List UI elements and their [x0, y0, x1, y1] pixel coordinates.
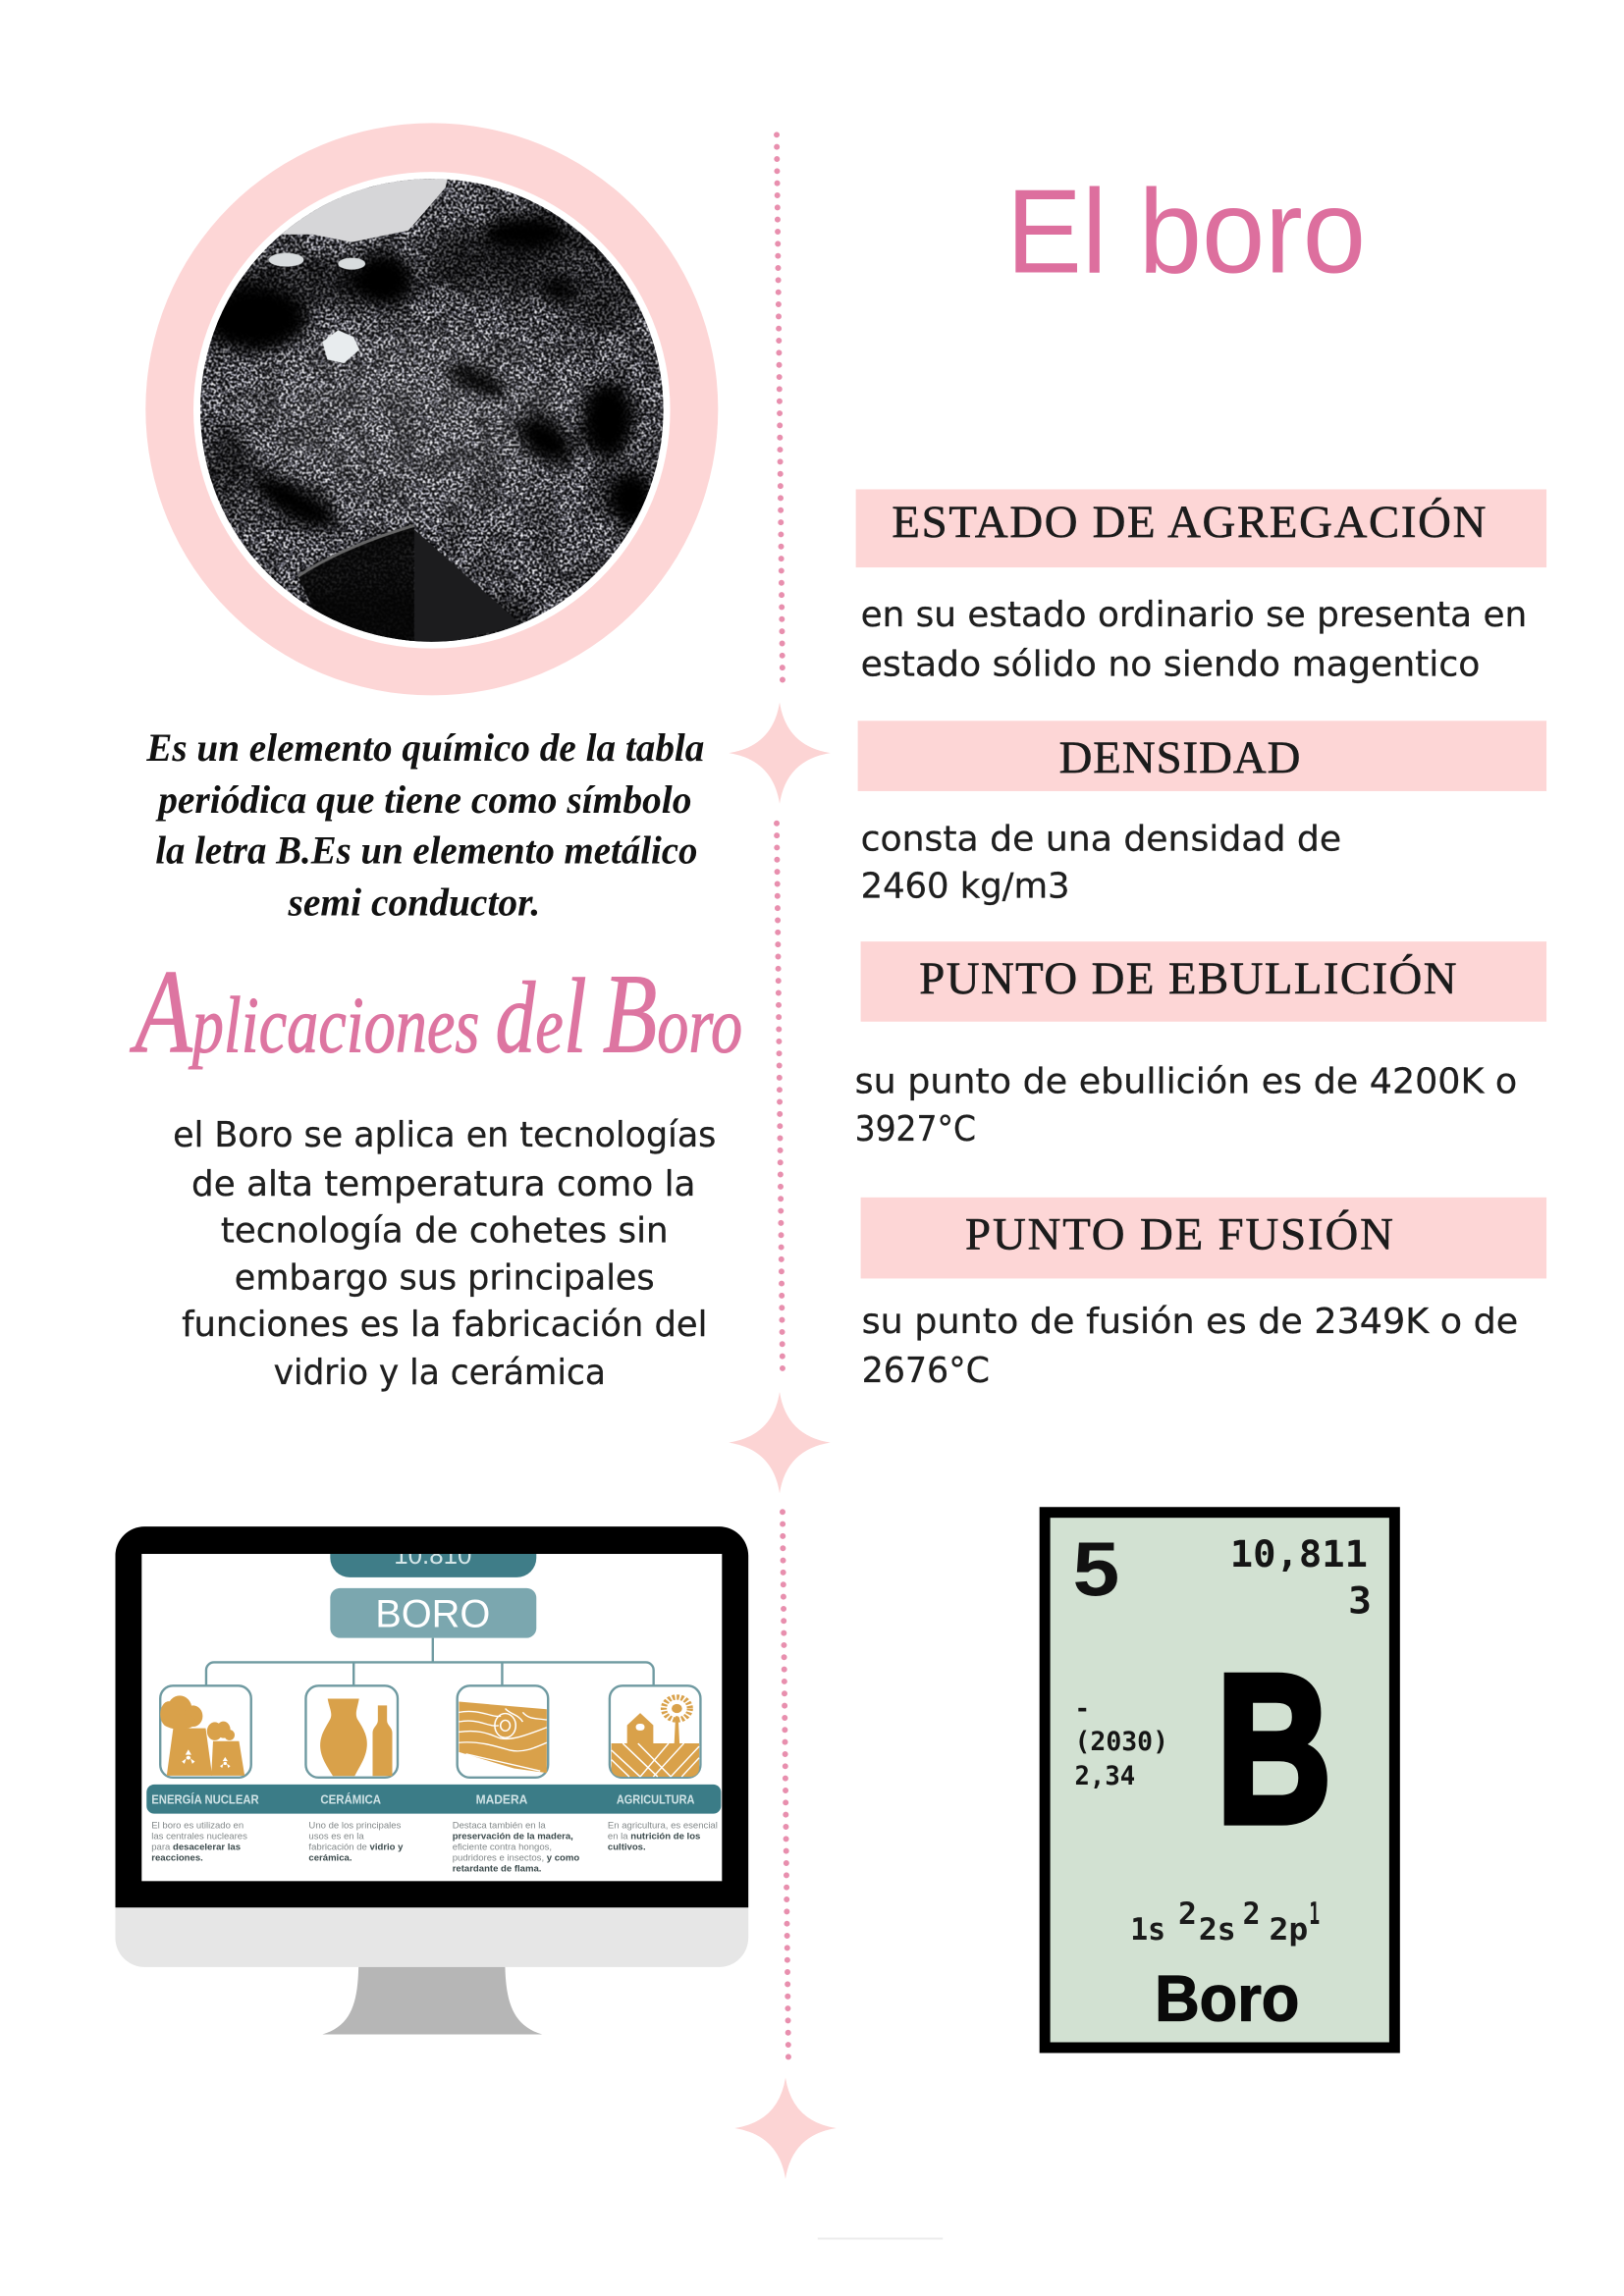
applications text: embargo sus principales — [235, 1257, 655, 1298]
heading: Aplicaciones del Boro: Aplicaciones del Boro — [130, 947, 742, 1079]
small captions: pudridores e insectos, y como — [453, 1852, 579, 1863]
applications text: de alta temperatura como la — [191, 1164, 695, 1204]
element name: Boro — [1155, 1963, 1299, 2035]
section: punto de ebullición — [855, 941, 1546, 1149]
star: lower — [734, 2077, 837, 2179]
applications text: funciones es la fabricación del — [182, 1305, 707, 1345]
small captions — [151, 1821, 718, 1874]
applications text: vidrio y la cerámica — [274, 1353, 606, 1393]
section: estado de agregación — [856, 489, 1546, 685]
icon: agriculture — [610, 1685, 700, 1778]
electron configuration — [1130, 1896, 1320, 1948]
section: punto de fusión: su punto de fusión es de 2349K o de — [862, 1302, 1518, 1342]
description text: periódica que tiene como símbolo — [155, 778, 691, 822]
star: middle — [729, 1392, 831, 1493]
description text: Es un elemento químico de la tabla — [145, 726, 704, 770]
applications text — [173, 1115, 716, 1393]
applications text: tecnología de cohetes sin — [221, 1211, 669, 1252]
timeline dotted line: middle — [777, 824, 783, 1371]
small captions: En agricultura, es esencial — [608, 1821, 718, 1832]
small captions: cultivos. — [608, 1842, 646, 1852]
physical data: (2030) — [1075, 1727, 1168, 1757]
small captions: las centrales nucleares — [151, 1832, 247, 1842]
small captions: en la nutrición de los — [608, 1832, 700, 1842]
icon: ceramics — [305, 1685, 398, 1778]
teal label band — [146, 1785, 721, 1814]
section: punto de fusión — [861, 1198, 1546, 1391]
section: estado de agregación: ESTADO DE AGREGACIÓN — [892, 497, 1486, 548]
section: densidad: consta de una densidad de — [861, 820, 1341, 860]
computer monitor with applications diagram — [115, 1526, 748, 2035]
connectors — [206, 1638, 654, 1685]
applications text: el Boro se aplica en tecnologías — [173, 1115, 716, 1155]
teal label band: CERÁMICA — [320, 1792, 381, 1807]
electron configuration: 2s — [1199, 1912, 1236, 1948]
small captions: reacciones. — [151, 1852, 203, 1863]
section: punto de fusión: PUNTO DE FUSIÓN — [965, 1209, 1393, 1260]
electron configuration: 2p — [1270, 1912, 1308, 1948]
timeline dotted line: upper — [777, 134, 783, 682]
atomic number: 5 — [1073, 1527, 1119, 1612]
electron configuration: 2 — [1178, 1896, 1197, 1932]
small captions: El boro es utilizado en — [151, 1821, 244, 1832]
atomic mass: 10,811 — [1230, 1532, 1368, 1575]
small captions: fabricación de vidrio y — [308, 1842, 404, 1852]
timeline dotted line: lower — [783, 1512, 788, 2059]
description text — [145, 726, 704, 924]
section: punto de ebullición: PUNTO DE EBULLICIÓN — [919, 953, 1457, 1004]
teal label band: MADERA — [476, 1792, 527, 1807]
section: punto de ebullición: 3927°C — [855, 1109, 976, 1149]
small captions: Uno de los principales — [308, 1821, 402, 1832]
small captions: preservación de la madera, — [453, 1832, 573, 1842]
section: densidad: DENSIDAD — [1059, 732, 1300, 783]
physical data: - — [1075, 1694, 1090, 1724]
top pill — [330, 1554, 536, 1577]
BORO box: BORO — [375, 1593, 490, 1636]
valence: 3 — [1348, 1579, 1372, 1623]
electron configuration: 2 — [1243, 1896, 1261, 1932]
section: densidad — [858, 721, 1546, 906]
electron configuration: 1 — [1309, 1896, 1320, 1932]
title: El boro — [1006, 165, 1366, 298]
section: estado de agregación: en su estado ordinario se presenta en — [861, 595, 1527, 635]
section: densidad: 2460 kg/m3 — [861, 866, 1070, 906]
physical data: 2,34 — [1075, 1761, 1135, 1791]
small captions: Destaca también en la — [453, 1821, 546, 1832]
teal label band: ENERGÍA NUCLEAR — [151, 1792, 259, 1807]
small captions: eficiente contra hongos, — [453, 1842, 552, 1852]
section: punto de fusión: 2676°C — [862, 1351, 990, 1391]
small captions: retardante de flama. — [453, 1863, 541, 1874]
periodic table card: boron — [1045, 1513, 1394, 2048]
small captions: para desacelerar las — [151, 1842, 241, 1852]
electron configuration: 1s — [1130, 1912, 1165, 1948]
small captions: cerámica. — [308, 1852, 352, 1863]
section: punto de ebullición: su punto de ebullición es de 4200K o — [855, 1061, 1517, 1101]
BORO box — [330, 1588, 536, 1638]
icon: wood — [458, 1685, 548, 1778]
section: estado de agregación: estado sólido no siendo magentico — [861, 645, 1480, 685]
star: upper — [729, 702, 831, 804]
small captions: usos es en la — [308, 1832, 364, 1842]
circular photo of boron with pink ring — [145, 123, 718, 695]
physical data — [1075, 1694, 1168, 1791]
icon: nuclear energy — [160, 1685, 251, 1778]
description text: la letra B.Es un elemento metálico — [155, 829, 697, 873]
description text: semi conductor. — [288, 881, 540, 924]
top pill: 10.810 — [394, 1542, 471, 1570]
teal label band: AGRICULTURA — [617, 1792, 694, 1807]
element symbol: B — [1217, 1630, 1331, 1867]
